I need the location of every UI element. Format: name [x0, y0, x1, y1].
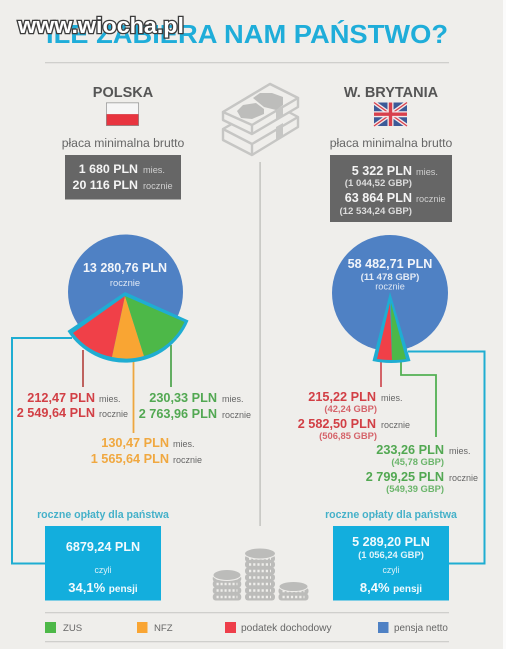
panel: UK wage box: (1 044,52 GBP) [345, 178, 412, 189]
text: UK tax figures: (42,24 GBP) [324, 403, 377, 414]
text: Polish NFZ figures [91, 436, 202, 466]
chart: UK pie [332, 235, 484, 564]
panel: Polish wage box [65, 155, 181, 200]
text: UK tax figures: mies. [381, 393, 403, 403]
text: UK ZUS figures: mies. [449, 446, 471, 456]
panel: Polish wage box: 20 116 PLN [73, 178, 138, 192]
text: Polish tax figures: rocznie [99, 409, 128, 419]
text: Polish NFZ figures: mies. [173, 439, 195, 449]
text: Polish ZUS figures: rocznie [222, 410, 251, 420]
text: Polish NFZ figures: rocznie [173, 455, 202, 465]
panel: UK wage box [330, 155, 452, 222]
text: Polish ZUS figures: 2 763,96 PLN [139, 407, 217, 421]
panel: Polish charges box: 34,1% pensji [68, 580, 138, 595]
panel: UK wage box: 5 322 PLN [352, 164, 412, 178]
icon: banknote stacks [223, 84, 298, 155]
panel: UK wage box: rocznie [416, 194, 446, 204]
panel: Polish charges box: 6879,24 PLN [66, 540, 140, 554]
text: Polish ZUS figures: 230,33 PLN [149, 391, 217, 405]
panel: UK charges box: (1 056,24 GBP) [358, 549, 424, 560]
icon: UK flag [374, 102, 407, 126]
icon: Polish flag [106, 102, 139, 126]
panel: UK header [330, 85, 453, 222]
text: Polish tax figures [17, 391, 128, 420]
text: Polish tax figures: 2 549,64 PLN [17, 406, 95, 420]
text: Polish ZUS figures: mies. [222, 394, 244, 404]
text: UK ZUS figures: (549,39 GBP) [386, 483, 444, 494]
text: Polish tax figures: 212,47 PLN [27, 391, 95, 405]
panel: UK wage box: 63 864 PLN [345, 191, 412, 205]
text: minimum wage label: płaca minimalna brutto [62, 136, 185, 150]
chart: UK pie: rocznie [375, 282, 405, 292]
panel: UK charges box: 5 289,20 PLN [352, 535, 430, 549]
chart: UK pie: (11 478 GBP) [361, 272, 419, 283]
text: Polish ZUS figures [139, 391, 251, 421]
panel: Polish wage box: rocznie [143, 181, 173, 191]
text: minimum wage label: płaca minimalna brutto [330, 136, 453, 150]
text: UK ZUS figures: (45,78 GBP) [391, 456, 444, 467]
panel: UK wage box: (12 534,24 GBP) [339, 206, 412, 217]
legend: pensja netto [394, 623, 448, 634]
chart: UK pie: 58 482,71 PLN [348, 257, 432, 271]
heading: Polska: POLSKA [93, 85, 154, 101]
text: UK tax figures [298, 390, 410, 441]
text: UK tax figures: (506,85 GBP) [319, 430, 377, 441]
chart: Polish pie [12, 234, 188, 564]
text: UK tax figures: rocznie [381, 420, 410, 430]
watermark: www.wiocha.pl [17, 13, 184, 38]
heading: Polish annual charges: roczne opłaty dla państwa [37, 509, 169, 521]
panel: Polish charges box: czyli [94, 565, 112, 575]
text: UK tax figures: 2 582,50 PLN [298, 417, 376, 431]
text: Polish NFZ figures: 1 565,64 PLN [91, 452, 169, 466]
heading: UK annual charges: roczne opłaty dla państwa [325, 509, 457, 521]
legend: ZUS [63, 623, 82, 634]
heading: W. Brytania: W. BRYTANIA [344, 85, 439, 101]
text: Polish tax figures: mies. [99, 394, 121, 404]
panel: UK wage box: mies. [416, 167, 438, 177]
panel: Polish wage box: mies. [143, 165, 165, 175]
panel: UK charges box: czyli [382, 565, 400, 575]
chart: Polish pie: rocznie [110, 277, 140, 288]
text: UK ZUS figures: rocznie [449, 473, 478, 483]
panel: Polish wage box: 1 680 PLN [79, 162, 138, 176]
panel: Polska header [62, 85, 185, 200]
chart: Polish pie: 13 280,76 PLN [83, 261, 167, 275]
text: UK ZUS figures [366, 443, 478, 494]
legend: NFZ [154, 623, 173, 634]
icon: coin stacks [213, 548, 308, 600]
connector: UK frame line [408, 352, 484, 564]
text: UK ZUS figures: 233,26 PLN [376, 443, 444, 457]
panel: UK charges box [333, 526, 449, 600]
panel: Polish charges box [45, 526, 161, 600]
connector: Polish frame line [12, 338, 72, 564]
text: UK tax figures: 215,22 PLN [308, 390, 376, 404]
title: ILE ZABIERA NAM PAŃSTWO? [46, 20, 448, 49]
text: UK ZUS figures: 2 799,25 PLN [366, 470, 444, 484]
panel: UK charges box: 8,4% pensji [360, 580, 422, 595]
text: Polish NFZ figures: 130,47 PLN [101, 436, 169, 450]
legend [45, 622, 448, 634]
legend: podatek dochodowy [241, 623, 333, 634]
